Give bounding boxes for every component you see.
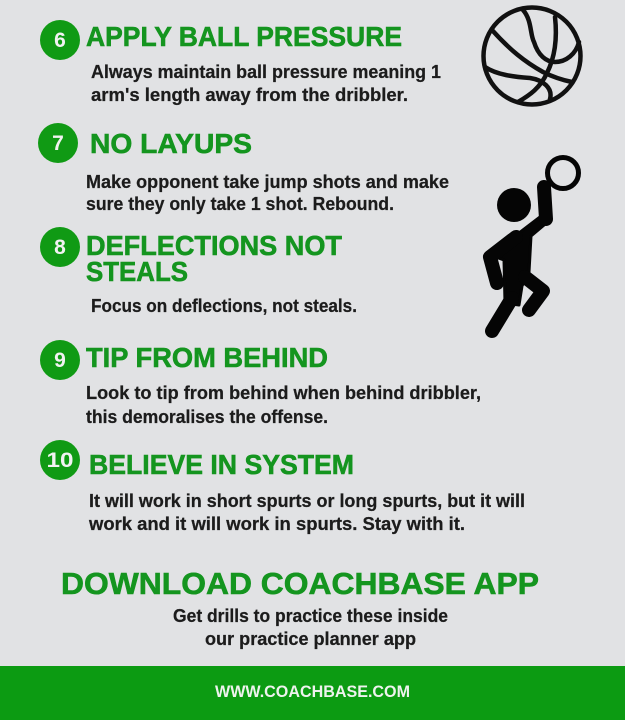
item 7: no layups: Make opponent take jump shots and make bbox=[86, 172, 449, 192]
item 8: deflections not steals: Focus on deflections, not steals. bbox=[91, 296, 357, 316]
item 8: deflections not steals bbox=[40, 227, 357, 316]
item 6: apply ball pressure: arm's length away from the dribbler. bbox=[91, 85, 408, 105]
item 7: no layups bbox=[38, 123, 449, 214]
call to action: our practice planner app bbox=[205, 629, 416, 649]
item 6: apply ball pressure: 6 bbox=[54, 29, 66, 52]
item 6: apply ball pressure: APPLY BALL PRESSURE bbox=[86, 21, 402, 52]
footer band: WWW.COACHBASE.COM bbox=[215, 682, 410, 701]
item 10: believe in system: It will work in short spurts or long spurts, but it will bbox=[89, 491, 525, 511]
item 9: tip from behind: Look to tip from behind when behind dribbler, bbox=[86, 383, 481, 403]
item 9: tip from behind: this demoralises the offense. bbox=[86, 407, 328, 427]
item 8: deflections not steals: 8 bbox=[54, 236, 66, 259]
item 10: believe in system: 10 bbox=[46, 449, 74, 472]
item 7: no layups: NO LAYUPS bbox=[90, 128, 252, 159]
item 8: deflections not steals: STEALS bbox=[86, 256, 188, 287]
item 9: tip from behind: TIP FROM BEHIND bbox=[86, 342, 328, 373]
item 8: deflections not steals: DEFLECTIONS NOT bbox=[86, 230, 342, 261]
item 9: tip from behind bbox=[40, 340, 481, 427]
call to action bbox=[61, 566, 539, 649]
item 6: apply ball pressure bbox=[40, 20, 441, 105]
footer band bbox=[0, 666, 625, 720]
icon: basketball bbox=[484, 8, 580, 104]
item 10: believe in system bbox=[40, 440, 525, 534]
item 7: no layups: 7 bbox=[52, 132, 64, 155]
item 9: tip from behind: 9 bbox=[54, 349, 66, 372]
call to action: Get drills to practice these inside bbox=[173, 606, 448, 626]
icon: player shooting a ball bbox=[490, 158, 578, 331]
item 6: apply ball pressure: Always maintain ball pressure meaning 1 bbox=[91, 62, 441, 82]
item 10: believe in system: work and it will work in spurts. Stay with it. bbox=[88, 514, 465, 534]
item 7: no layups: sure they only take 1 shot. Rebound. bbox=[86, 194, 394, 214]
call to action: DOWNLOAD COACHBASE APP bbox=[61, 566, 539, 601]
item 10: believe in system: BELIEVE IN SYSTEM bbox=[89, 449, 354, 480]
